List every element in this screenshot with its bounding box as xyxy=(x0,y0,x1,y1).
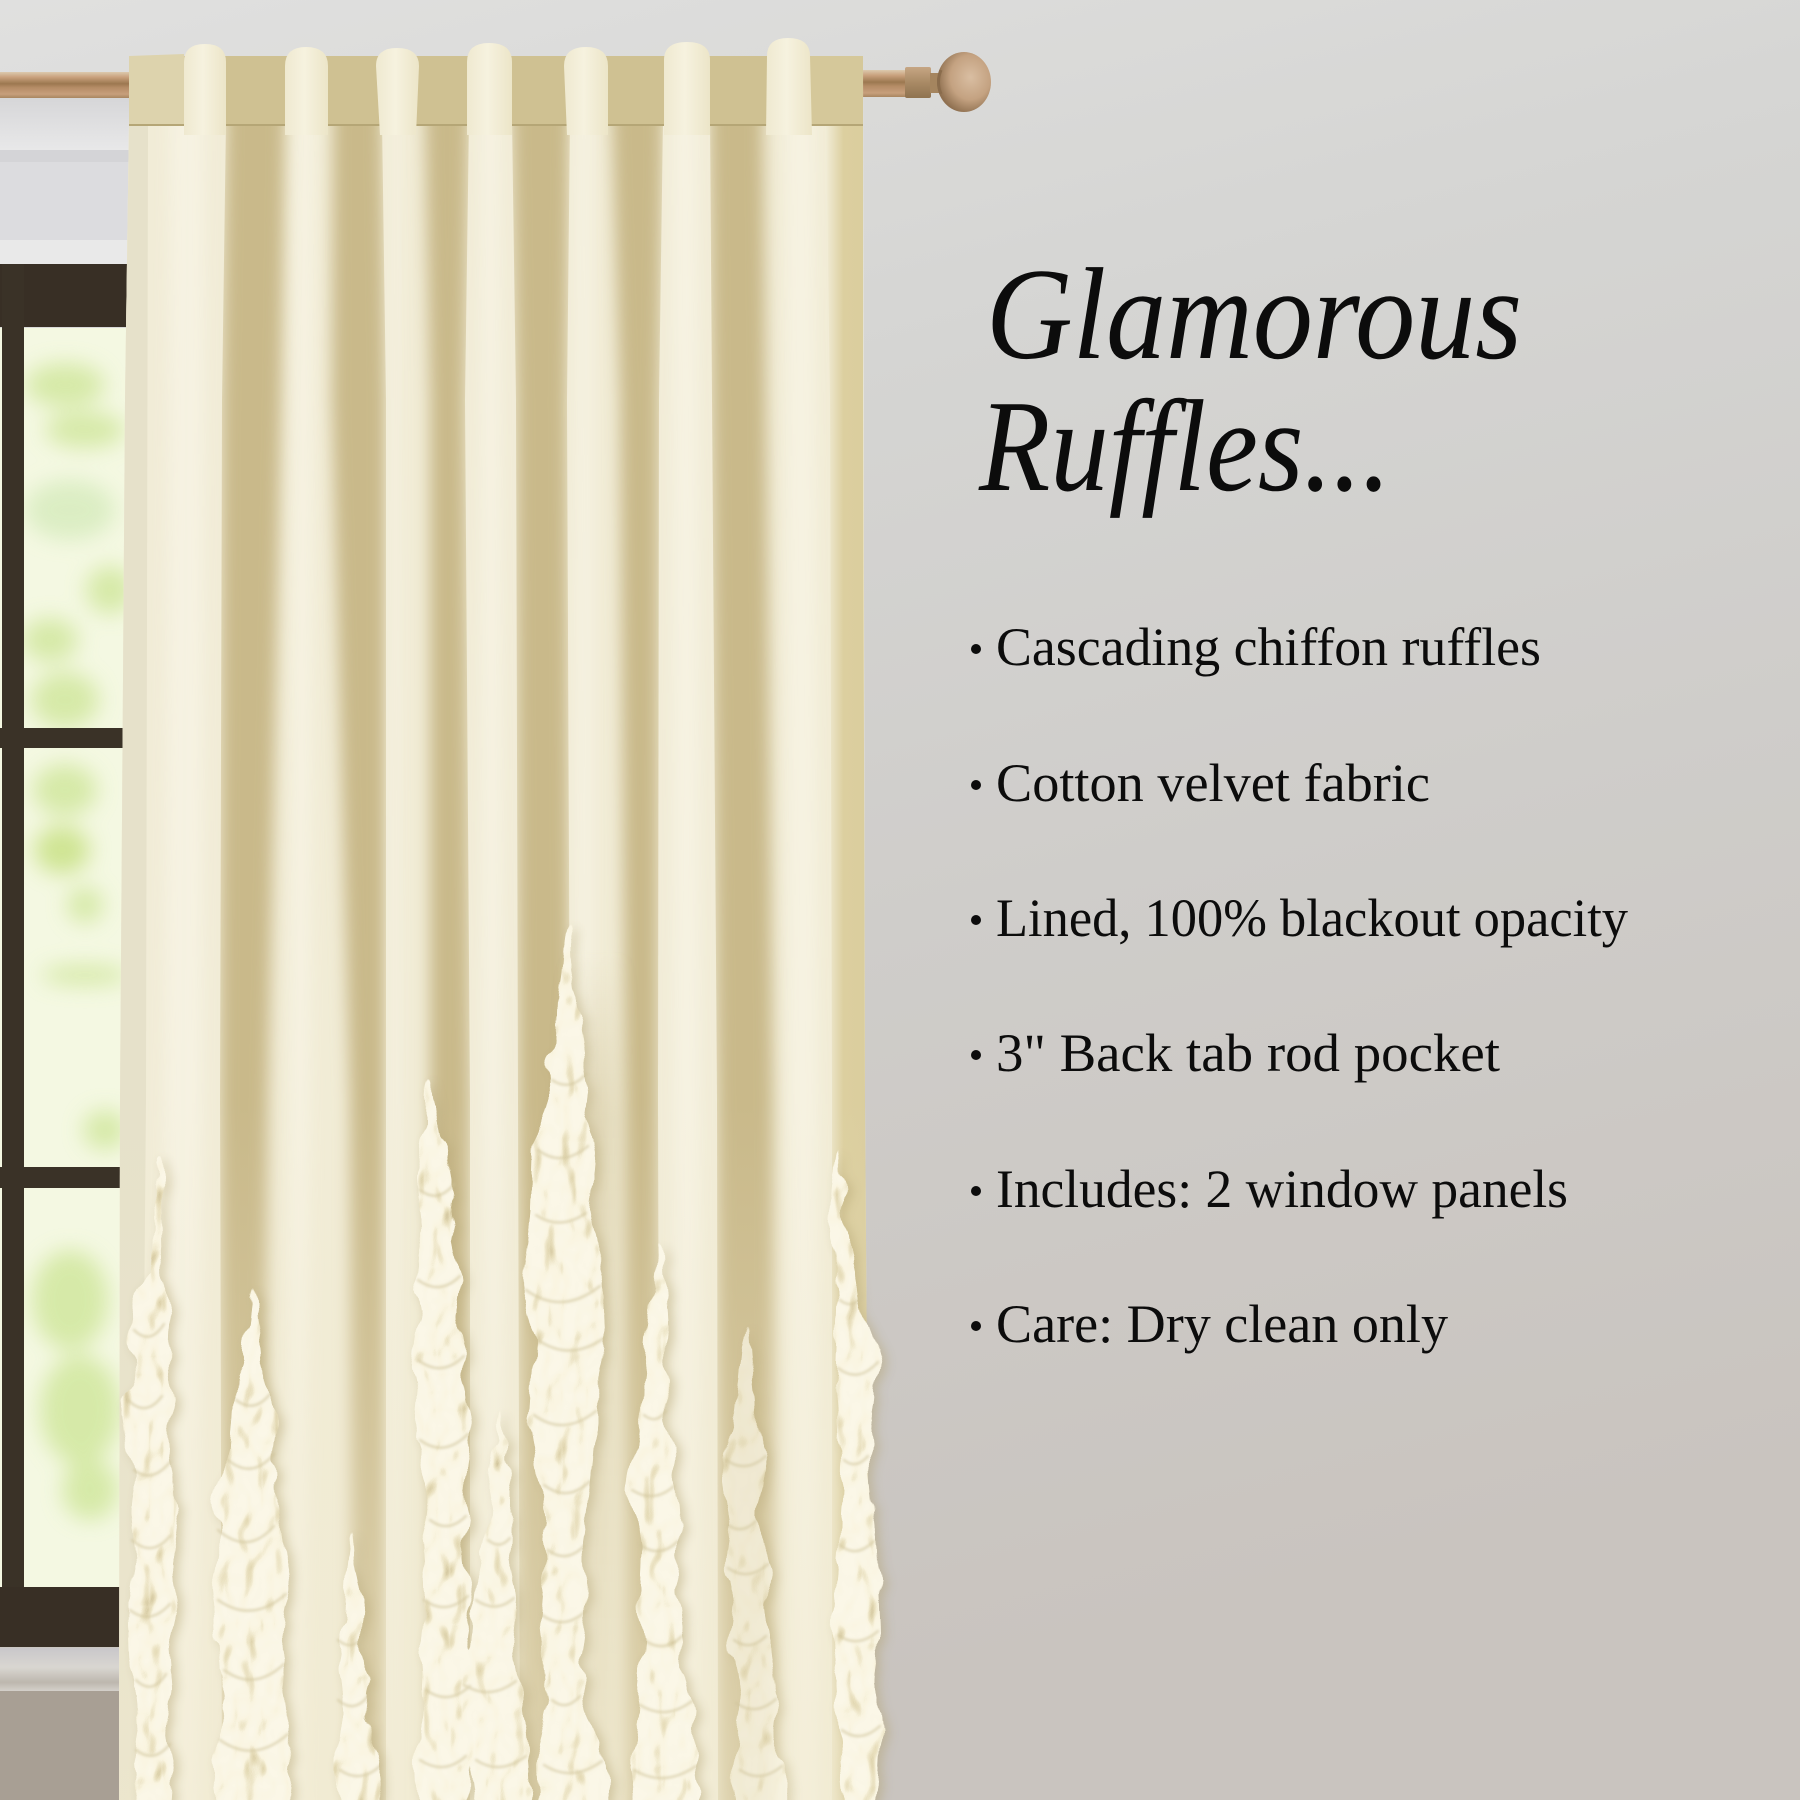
feature: fabric: Cotton velvet fabric xyxy=(996,753,1430,813)
ruffle strand 1 xyxy=(120,1156,178,1800)
curtain rod right with finial xyxy=(855,52,991,112)
feature: care: Care: Dry clean only xyxy=(996,1294,1448,1354)
feature: rod pocket: 3" Back tab rod pocket xyxy=(996,1023,1500,1083)
feature: includes: Includes: 2 window panels xyxy=(996,1159,1568,1219)
feature: lining: Lined, 100% blackout opacity xyxy=(996,888,1628,948)
ruffle strand 3 xyxy=(336,1515,382,1800)
ruffle strand 7 xyxy=(628,1223,700,1800)
lit folds xyxy=(119,120,718,1800)
title: Glamorous xyxy=(986,242,1522,387)
fold shadows xyxy=(220,120,775,1800)
curtain rod left xyxy=(0,72,135,98)
right hem band xyxy=(826,125,870,1800)
feature: ruffles: Cascading chiffon ruffles xyxy=(996,617,1541,677)
fold highlights xyxy=(160,125,820,1800)
ruffle strand 9 xyxy=(830,1131,882,1800)
translucent ruffle strand 8 xyxy=(722,1319,784,1800)
title: Ruffles... xyxy=(978,374,1391,519)
window and trim xyxy=(0,98,135,1800)
left hem band xyxy=(119,125,148,1800)
curtain panel xyxy=(119,38,871,1800)
pleats xyxy=(184,38,812,135)
ruffle strand 6 xyxy=(522,905,606,1800)
ruffle fold creases xyxy=(128,1074,880,1778)
ruffle strand 2 xyxy=(212,1274,292,1800)
ruffle strand 5 xyxy=(458,1395,532,1800)
back tabs xyxy=(129,54,863,126)
chiffon ruffles xyxy=(120,905,882,1800)
title xyxy=(978,242,1522,519)
ruffle strand 4 xyxy=(412,1068,472,1800)
feature list xyxy=(971,617,1628,1354)
